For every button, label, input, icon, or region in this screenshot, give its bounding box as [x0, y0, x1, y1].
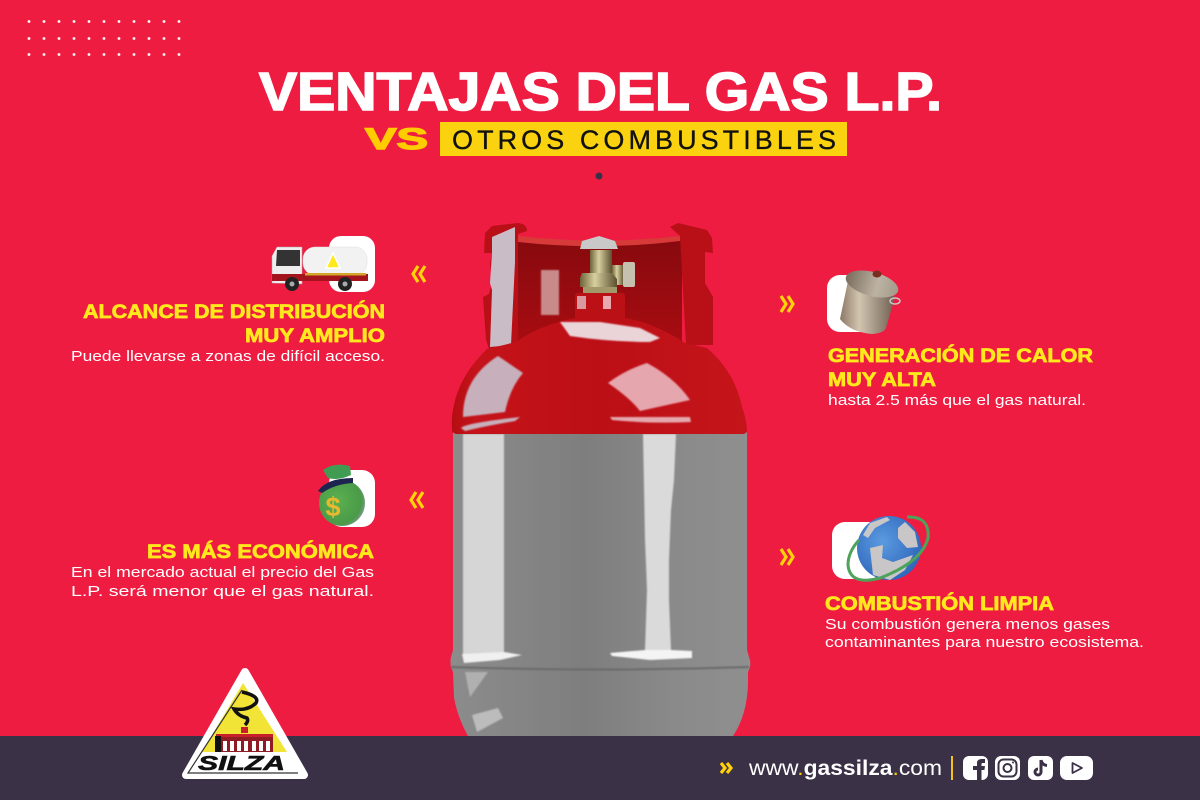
heading line 2: MUY ALTA	[828, 370, 936, 391]
icon: money bag: $	[325, 492, 341, 522]
icon: money bag	[318, 465, 365, 526]
benefit: generacion de calor	[781, 265, 1093, 409]
subtitle	[365, 122, 847, 156]
body	[825, 617, 1144, 651]
small dot	[596, 172, 602, 180]
benefit: es mas economica	[71, 465, 423, 600]
icon: gas truck	[272, 247, 368, 291]
logo: outline	[188, 690, 298, 773]
body: contaminantes para nuestro ecosistema.	[825, 635, 1144, 651]
body	[71, 565, 374, 600]
logo: wordmark: SILZA	[198, 753, 285, 775]
benefit: alcance de distribucion	[71, 236, 425, 365]
logo: smoke	[234, 692, 257, 725]
heading line 2: MUY AMPLIO	[245, 326, 385, 347]
footer divider	[951, 756, 953, 780]
logo	[186, 672, 304, 775]
subtitle: highlight bar	[440, 122, 847, 156]
heading: COMBUSTIÓN LIMPIA	[825, 593, 1054, 615]
body: hasta 2.5 más que el gas natural.	[828, 393, 1086, 409]
cylinder: red dome	[452, 318, 747, 434]
icon: youtube	[1060, 756, 1093, 780]
icon bg	[827, 275, 875, 332]
icon: globe	[848, 516, 928, 580]
chevrons	[781, 296, 793, 312]
cylinder: valve	[580, 236, 635, 293]
subtitle: otros combustibles: OTROS COMBUSTIBLES	[452, 125, 836, 155]
logo: yellow triangle	[202, 683, 287, 752]
cylinder: dome reflections	[461, 322, 691, 431]
body: Puede llevarse a zonas de difícil acceso.	[71, 349, 385, 365]
cylinder: left collar	[483, 223, 527, 349]
benefit: combustion limpia	[781, 516, 1144, 651]
icon: instagram	[995, 756, 1020, 780]
cylinder: left collar reflection	[490, 227, 515, 347]
title: VENTAJAS DEL GAS L.P.	[259, 62, 942, 122]
cylinder: right collar	[670, 223, 713, 345]
chevrons	[781, 549, 793, 565]
logo: white triangle	[186, 672, 304, 775]
icon: facebook	[963, 756, 988, 780]
cylinder: grey reflections	[451, 434, 749, 732]
cylinder: collar inner highlights	[518, 236, 680, 315]
footer bar	[0, 736, 1200, 800]
heading: ES MÁS ECONÓMICA	[147, 541, 374, 563]
cylinder: grey body	[450, 432, 750, 736]
icon bg	[329, 470, 375, 527]
website: www.gassilza .com	[748, 757, 942, 780]
cylinder: collar inner	[515, 236, 682, 345]
footer chevrons	[721, 763, 731, 773]
cylinder: valve neck	[575, 293, 625, 321]
gas cylinder	[450, 223, 750, 736]
body: L.P. será menor que el gas natural.	[71, 584, 374, 600]
logo: plant	[215, 727, 273, 752]
heading: GENERACIÓN DE CALOR	[828, 345, 1093, 367]
body: Su combustión genera menos gases	[825, 617, 1110, 633]
decorative dot grid	[28, 20, 180, 56]
icon: tiktok	[1028, 756, 1053, 780]
icon: pot	[840, 265, 901, 334]
subtitle: VS: VS	[365, 123, 428, 156]
chevrons	[411, 492, 423, 508]
icon bg	[832, 522, 882, 579]
icon bg	[329, 236, 375, 292]
body: En el mercado actual el precio del Gas	[71, 565, 374, 581]
chevrons	[413, 266, 425, 282]
heading: ALCANCE DE DISTRIBUCIÓN	[83, 301, 385, 323]
